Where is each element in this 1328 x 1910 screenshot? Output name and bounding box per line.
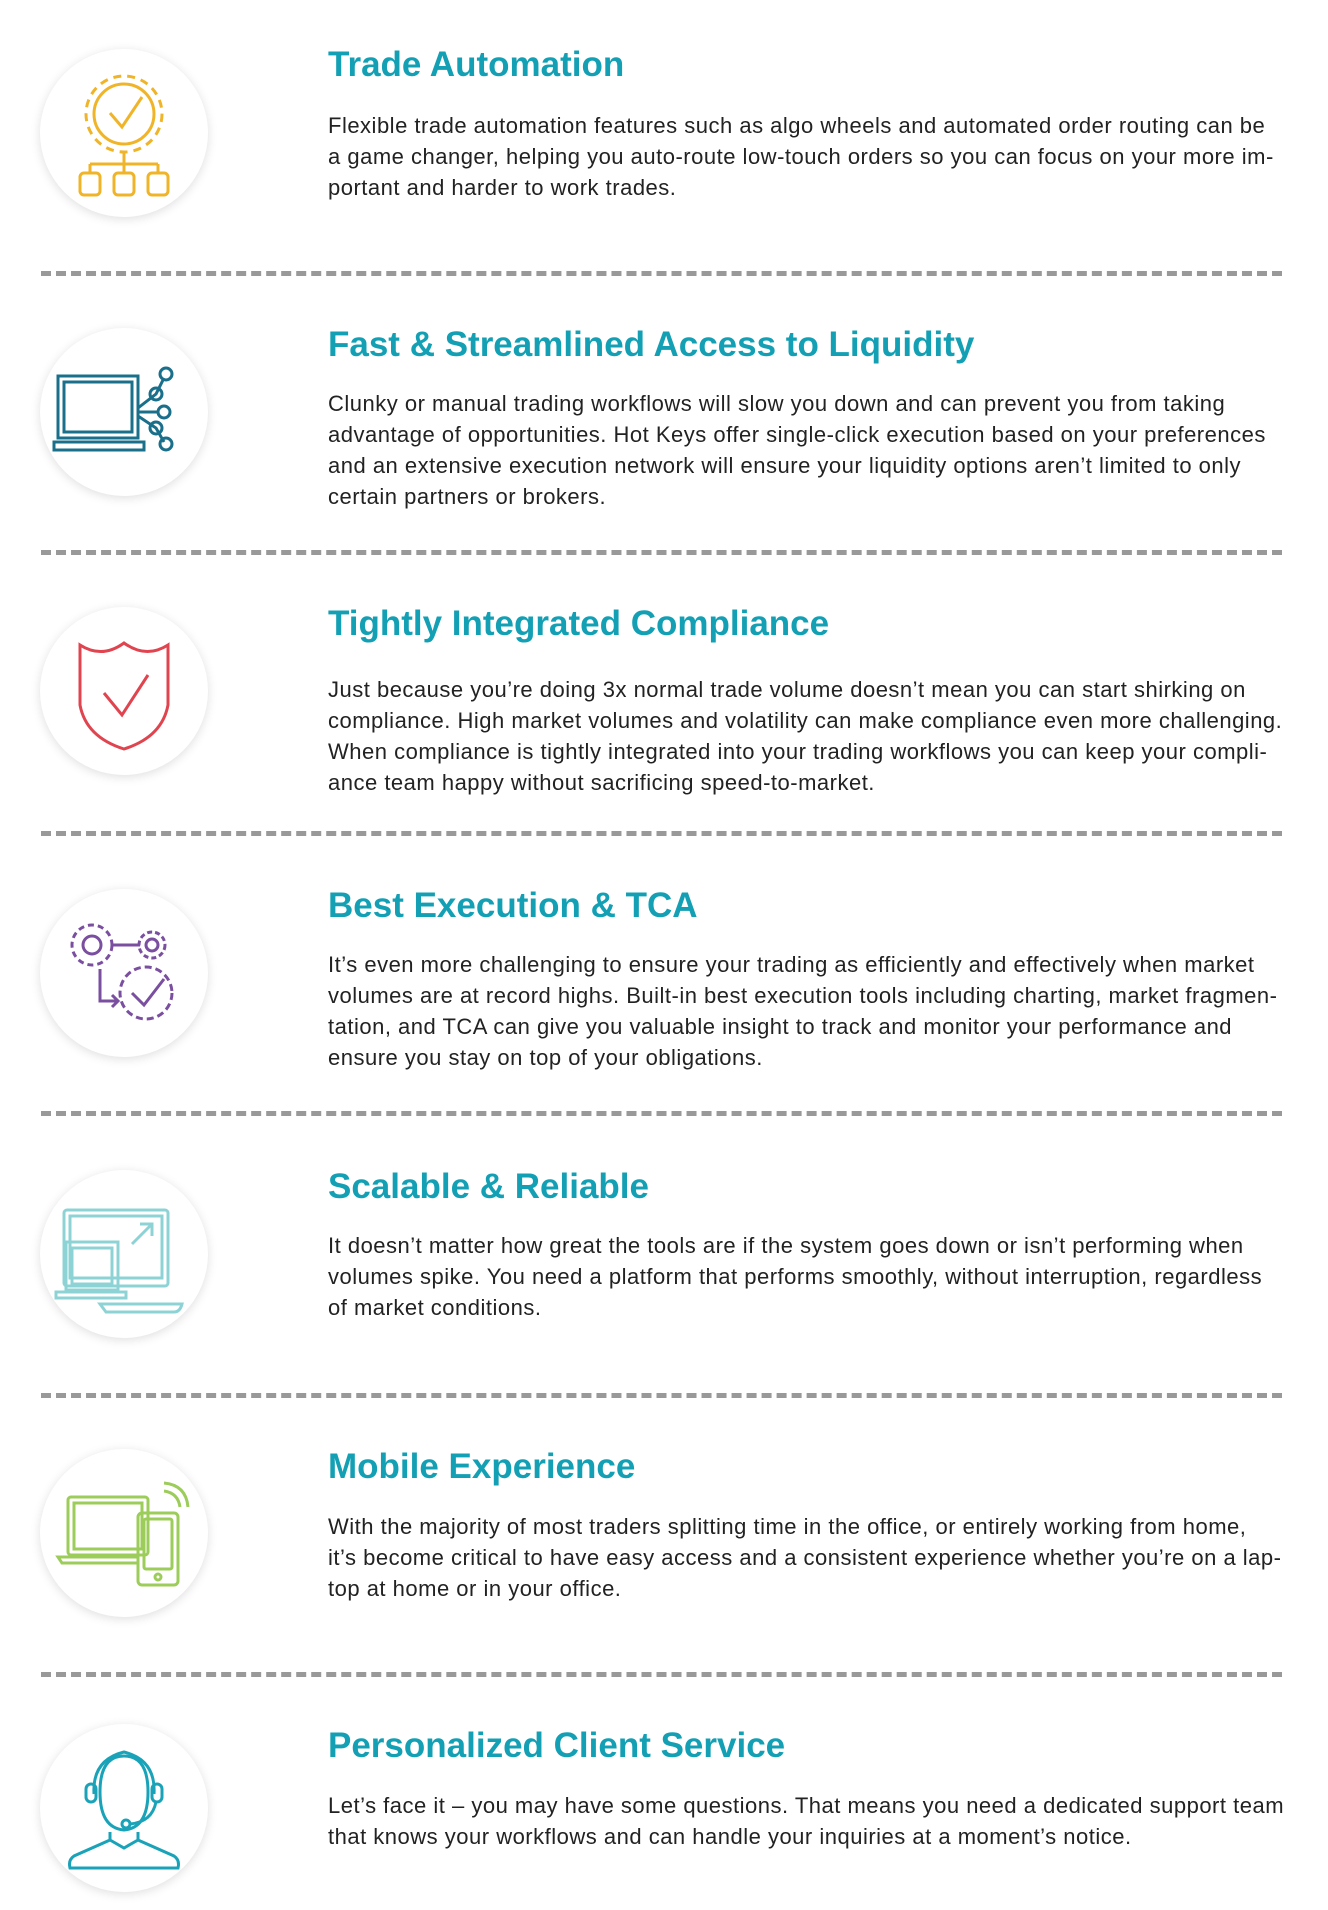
- icon: headset person: [40, 1724, 208, 1892]
- heading: client service: Personalized Client Service: [328, 1726, 785, 1765]
- text: client service: [328, 1793, 1284, 1849]
- text: trade automation: [328, 113, 1274, 200]
- text: liquidity: advantage of opportunities. Hot Keys offer single-click execution based on your preferences: [328, 422, 1266, 447]
- heading: scalable: Scalable & Reliable: [328, 1167, 649, 1206]
- icon: scalable devices: [40, 1170, 208, 1338]
- text: trade automation: Flexible trade automation features such as algo wheels and automated order routing can be: [328, 113, 1265, 138]
- text: scalable: It doesn’t matter how great the tools are if the system goes down or isn’t performing when: [328, 1233, 1244, 1258]
- heading: mobile: Mobile Experience: [328, 1447, 635, 1486]
- text: compliance: [328, 677, 1282, 795]
- heading: compliance: Tightly Integrated Compliance: [328, 604, 829, 643]
- icon: laptop network: [40, 328, 208, 496]
- text: mobile: With the majority of most traders splitting time in the office, or entirely working from home,: [328, 1514, 1246, 1539]
- text: liquidity: Clunky or manual trading workflows will slow you down and can prevent you from taking: [328, 391, 1225, 416]
- text: best execution: ensure you stay on top of your obligations.: [328, 1045, 763, 1070]
- text: best execution: It’s even more challenging to ensure your trading as efficiently and effectively when market: [328, 952, 1254, 977]
- text: trade automation: a game changer, helping you auto-route low-touch orders so you can focus on your more im-: [328, 144, 1274, 169]
- text: best execution: [328, 952, 1277, 1070]
- text: scalable: volumes spike. You need a platform that performs smoothly, without interruption, regardless: [328, 1264, 1262, 1289]
- text: liquidity: [328, 391, 1266, 509]
- text: compliance: Just because you’re doing 3x normal trade volume doesn’t mean you can start shirking on: [328, 677, 1246, 702]
- text: trade automation: portant and harder to work trades.: [328, 175, 676, 200]
- text: client service: that knows your workflows and can handle your inquiries at a moment’s notice.: [328, 1824, 1132, 1849]
- text: mobile: [328, 1514, 1281, 1601]
- text: liquidity: certain partners or brokers.: [328, 484, 606, 509]
- text: compliance: When compliance is tightly integrated into your trading workflows you can keep your compli-: [328, 739, 1267, 764]
- text: best execution: volumes are at record highs. Built-in best execution tools including charting, market fragmen-: [328, 983, 1277, 1008]
- text: scalable: of market conditions.: [328, 1295, 541, 1320]
- icon: gears execution: [40, 889, 208, 1057]
- icon: shield: [40, 607, 208, 775]
- text: compliance: compliance. High market volumes and volatility can make compliance even more challenging.: [328, 708, 1282, 733]
- text: mobile: it’s become critical to have easy access and a consistent experience whether you’re on a lap-: [328, 1545, 1281, 1570]
- text: best execution: tation, and TCA can give you valuable insight to track and monitor your performance and: [328, 1014, 1232, 1039]
- heading: trade automation: Trade Automation: [328, 45, 624, 84]
- icon: mobile devices: [40, 1449, 208, 1617]
- text: scalable: [328, 1233, 1262, 1320]
- text: client service: Let’s face it – you may have some questions. That means you need a dedicated support team: [328, 1793, 1284, 1818]
- text: mobile: top at home or in your office.: [328, 1576, 621, 1601]
- text: liquidity: and an extensive execution network will ensure your liquidity options aren’t limited to only: [328, 453, 1241, 478]
- heading: liquidity: Fast & Streamlined Access to Liquidity: [328, 325, 974, 364]
- icon: trade automation gear: [40, 49, 208, 217]
- heading: best execution: Best Execution & TCA: [328, 886, 698, 925]
- text: compliance: ance team happy without sacrificing speed-to-market.: [328, 770, 875, 795]
